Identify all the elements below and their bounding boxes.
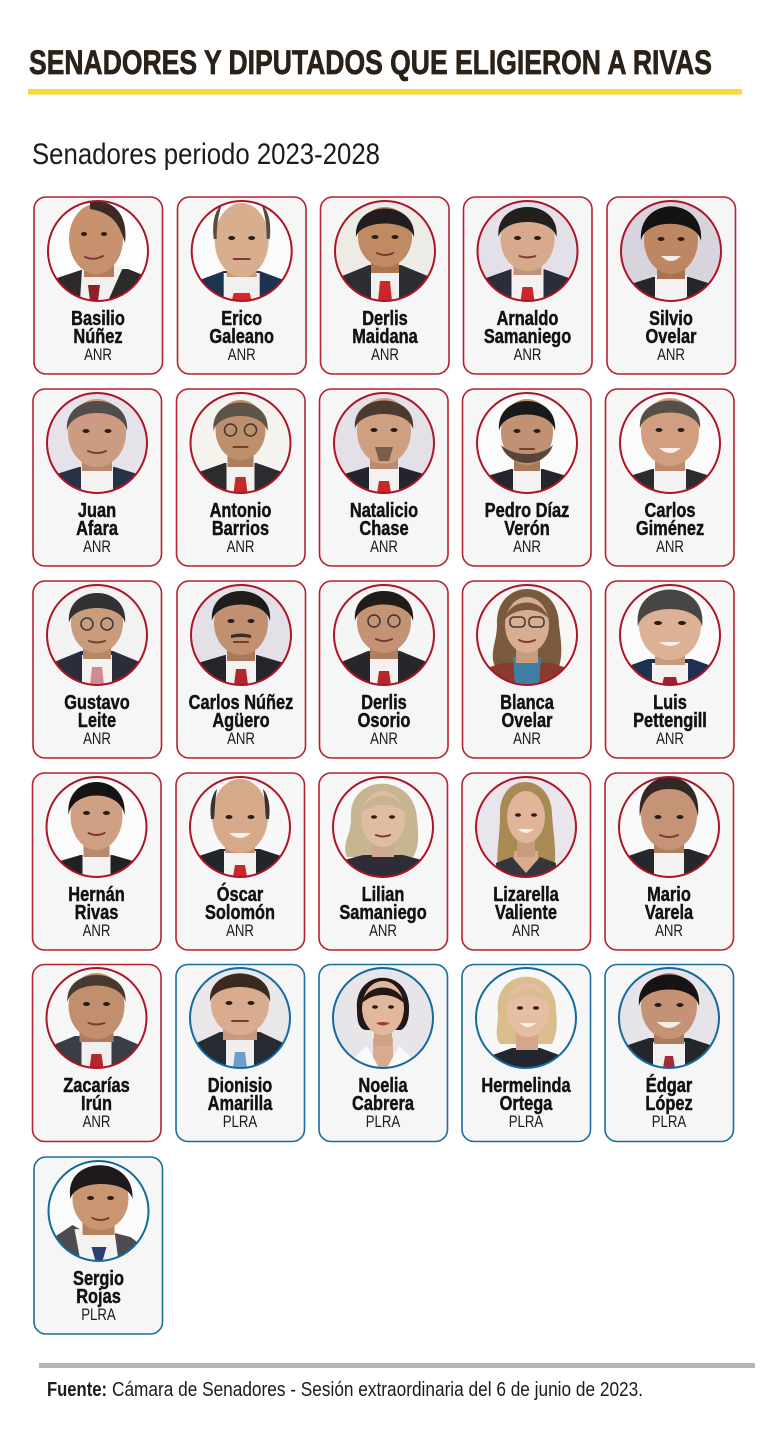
card: Noelia Cabrera: [319, 964, 448, 1142]
portrait: Derlis Maidana: [335, 201, 435, 301]
party: PLRA: [509, 1113, 543, 1131]
name: Carlos Núñez: [189, 690, 293, 713]
name: López: [645, 1091, 693, 1114]
party: ANR: [656, 538, 684, 556]
portrait: Blanca Ovelar: [477, 585, 577, 685]
card: Lizarella Valiente: [462, 773, 590, 950]
card: Silvio Ovelar: [607, 197, 736, 374]
portrait: Zacarías Irún: [46, 968, 146, 1068]
card: Óscar Solomón: [176, 773, 304, 950]
source note: Cámara de Senadores - Sesión extraordinaria del 6 de junio de 2023.: [112, 1379, 643, 1401]
name: Édgar: [646, 1073, 692, 1096]
name: [636, 498, 704, 539]
portrait: Óscar Solomón: [190, 777, 290, 877]
name: Carlos: [645, 498, 695, 521]
name: [208, 1073, 273, 1114]
name: [645, 306, 697, 347]
name: [210, 498, 271, 539]
card: Basilio Núñez: [34, 197, 162, 374]
card: Juan Afara: [33, 389, 162, 566]
name: Samaniego: [339, 900, 427, 923]
card: Mario Varela: [605, 773, 734, 950]
party: ANR: [83, 538, 111, 556]
party: ANR: [227, 538, 255, 556]
name: Mario: [647, 882, 691, 905]
name: Lilian: [362, 882, 404, 905]
name: Dionisio: [208, 1073, 272, 1096]
name: Ovelar: [501, 708, 553, 731]
party: ANR: [512, 922, 540, 940]
name: [481, 1073, 571, 1114]
name: Núñez: [73, 324, 123, 347]
card: Hermelinda Ortega: [462, 964, 590, 1142]
name: Rivas: [75, 900, 118, 923]
party: ANR: [370, 730, 398, 748]
name: Agüero: [212, 708, 270, 731]
portrait: Gustavo Leite: [47, 585, 147, 685]
name: [645, 882, 694, 923]
name: [352, 1073, 415, 1114]
portrait: Natalicio Chase: [334, 393, 434, 493]
portrait: Arnaldo Samaniego: [478, 201, 578, 301]
name: Pedro Díaz: [485, 498, 569, 521]
name: Basilio: [71, 306, 125, 329]
party: ANR: [514, 346, 542, 364]
name: Luis: [653, 690, 687, 713]
portrait: Carlos Giménez: [620, 393, 720, 493]
card: Édgar López: [605, 964, 734, 1142]
name: Cabrera: [352, 1091, 415, 1114]
name: Juan: [78, 498, 116, 521]
name: Blanca: [500, 690, 555, 713]
name: Amarilla: [208, 1091, 273, 1114]
party: PLRA: [366, 1113, 400, 1131]
card: Antonio Barrios: [176, 389, 305, 566]
card: Lilian Samaniego: [319, 773, 448, 950]
party: ANR: [83, 922, 111, 940]
name: Verón: [504, 516, 550, 539]
portrait: Lilian Samaniego: [333, 777, 433, 877]
portrait: Luis Pettengill: [620, 585, 720, 685]
name: Varela: [645, 900, 694, 923]
name: Noelia: [358, 1073, 408, 1096]
card: Hernán Rivas: [32, 773, 161, 950]
card: Zacarías Irún: [32, 964, 161, 1142]
party: ANR: [226, 922, 254, 940]
party: ANR: [371, 346, 399, 364]
name: Irún: [81, 1091, 112, 1114]
name: Valiente: [495, 900, 557, 923]
name: Giménez: [636, 516, 704, 539]
card: Natalicio Chase: [320, 389, 448, 566]
party: ANR: [228, 346, 256, 364]
name: [358, 690, 410, 731]
name: Pettengill: [633, 708, 707, 731]
portrait: Sergio Rojas: [48, 1161, 148, 1261]
portrait: Noelia Cabrera: [333, 968, 433, 1068]
portrait: Carlos Núñez Agüero: [191, 585, 291, 685]
card: Blanca Ovelar: [462, 581, 591, 758]
party: ANR: [657, 346, 685, 364]
name: Derlis: [362, 306, 408, 329]
name: Galeano: [209, 324, 274, 347]
party: ANR: [369, 922, 397, 940]
name: Chase: [359, 516, 409, 539]
name: Maidana: [352, 324, 419, 347]
portrait: Pedro Díaz Verón: [477, 393, 577, 493]
card: Carlos Giménez: [606, 389, 734, 566]
party: ANR: [227, 730, 255, 748]
portrait: Édgar López: [619, 968, 719, 1068]
name: [339, 882, 427, 923]
portrait: Hermelinda Ortega: [476, 968, 576, 1068]
card: Dionisio Amarilla: [176, 964, 304, 1142]
card: Derlis Maidana: [320, 197, 449, 374]
name: [205, 882, 275, 923]
name: [64, 690, 130, 731]
party: ANR: [84, 346, 112, 364]
party: ANR: [655, 922, 683, 940]
party: PLRA: [81, 1306, 116, 1324]
party: ANR: [370, 538, 398, 556]
name: [484, 306, 571, 347]
name: [76, 498, 119, 539]
portrait: Mario Varela: [619, 777, 719, 877]
name: Sergio: [73, 1266, 124, 1289]
name: Afara: [76, 516, 119, 539]
name: Hernán: [68, 882, 125, 905]
name: Erico: [221, 306, 262, 329]
portrait: Derlis Osorio: [334, 585, 434, 685]
name: [189, 690, 293, 731]
name: Gustavo: [64, 690, 130, 713]
name: Natalicio: [350, 498, 418, 521]
name: [633, 690, 707, 731]
name: Barrios: [212, 516, 269, 539]
name: Antonio: [210, 498, 271, 521]
name: [493, 882, 560, 923]
name: [485, 498, 569, 539]
card: Arnaldo Samaniego: [464, 197, 592, 374]
subtitle: Senadores periodo 2023-2028: [32, 138, 380, 171]
portrait: Juan Afara: [47, 393, 147, 493]
name: [71, 306, 125, 347]
name: Derlis: [361, 690, 407, 713]
name: Lizarella: [493, 882, 560, 905]
name: [645, 1073, 693, 1114]
footer rule: [39, 1363, 755, 1368]
name: Zacarías: [63, 1073, 130, 1096]
name: Ovelar: [645, 324, 697, 347]
name: Óscar: [217, 882, 263, 905]
name: [352, 306, 419, 347]
name: Hermelinda: [481, 1073, 571, 1096]
card: Derlis Osorio: [320, 581, 448, 758]
portrait: Erico Galeano: [192, 201, 292, 301]
name: Samaniego: [484, 324, 571, 347]
name: Arnaldo: [497, 306, 558, 329]
card: Carlos Núñez Agüero: [177, 581, 306, 758]
name: [63, 1073, 130, 1114]
party: PLRA: [223, 1113, 257, 1131]
source note: Fuente:: [47, 1379, 107, 1401]
name: [209, 306, 274, 347]
party: ANR: [656, 730, 684, 748]
card: Erico Galeano: [178, 197, 306, 374]
party: ANR: [83, 730, 111, 748]
party: ANR: [83, 1113, 111, 1131]
name: [68, 882, 125, 923]
card: Sergio Rojas: [34, 1157, 162, 1334]
name: Rojas: [76, 1284, 121, 1307]
portrait: Basilio Núñez: [48, 201, 148, 301]
party: PLRA: [652, 1113, 686, 1131]
portrait: Lizarella Valiente: [476, 777, 576, 877]
name: Solomón: [205, 900, 275, 923]
name: [500, 690, 555, 731]
portrait: Silvio Ovelar: [621, 201, 721, 301]
portrait: Dionisio Amarilla: [190, 968, 290, 1068]
portrait: Antonio Barrios: [190, 393, 290, 493]
portrait: Hernán Rivas: [46, 777, 146, 877]
name: [73, 1266, 124, 1307]
name: Silvio: [649, 306, 693, 329]
title underline: [28, 89, 742, 94]
card: Gustavo Leite: [33, 581, 162, 758]
name: [350, 498, 418, 539]
name: Ortega: [500, 1091, 553, 1114]
name: Leite: [78, 708, 116, 731]
party: ANR: [513, 538, 541, 556]
name: Osorio: [358, 708, 410, 731]
card: Luis Pettengill: [606, 581, 734, 758]
party: ANR: [513, 730, 541, 748]
card: Pedro Díaz Verón: [462, 389, 591, 566]
